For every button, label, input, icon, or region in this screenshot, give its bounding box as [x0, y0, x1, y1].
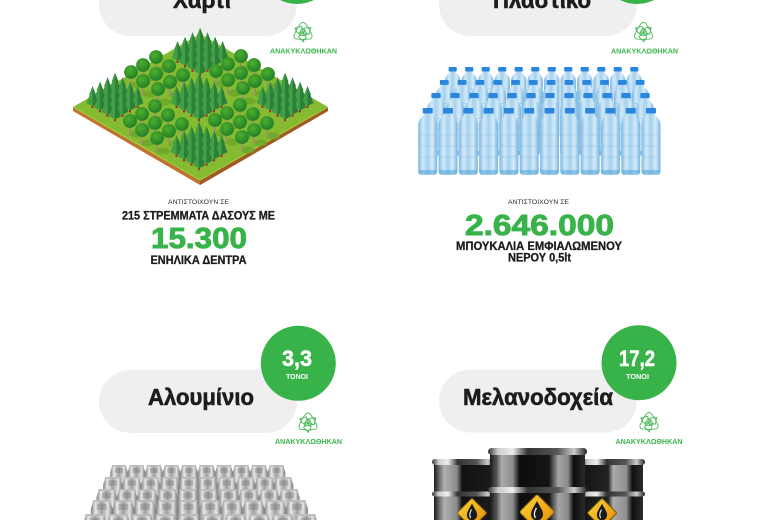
label pill: hotels: Μελανοδοχεία — [463, 384, 613, 410]
tonnage badge: paper — [260, 0, 334, 4]
tonnage badge: hotels: ΤΟΝΟΙ — [626, 372, 649, 381]
recycled label: hotels: ΑΝΑΚΥΚΛΩΘΗΚΑΝ — [616, 439, 682, 446]
panel: paper — [73, 0, 337, 267]
illustration: isometric forest — [73, 28, 328, 185]
equivalence text: forest: ΑΝΤΙΣΤΟΙΧΟΥΝ ΣΕ — [168, 199, 230, 206]
panel: hotels — [432, 325, 682, 520]
label pill: aluminium: Αλουμίνιο — [148, 384, 254, 410]
label pill: hotels — [439, 370, 637, 432]
equivalence text: forest: 215 ΣΤΡΕΜΜΑΤΑ ΔΑΣΟΥΣ ΜΕ — [122, 210, 275, 222]
label pill: plastic — [439, 0, 637, 36]
equivalence text: forest: ΕΝΗΛΙΚΑ ΔΕΝΤΡΑ — [150, 255, 246, 267]
panel: plastic — [418, 0, 678, 264]
recycled label: aluminium: ΑΝΑΚΥΚΛΩΘΗΚΑΝ — [275, 439, 342, 446]
equivalence text: bottles: ΜΠΟΥΚΑΛΙΑ ΕΜΦΙΑΛΩΜΕΝΟΥ — [456, 241, 622, 253]
equivalence text: bottles: ΑΝΤΙΣΤΟΙΧΟΥΝ ΣΕ — [508, 199, 570, 206]
icon: recycle hotels — [636, 412, 662, 434]
tonnage badge: hotels — [602, 325, 676, 400]
recycled label: paper: ΑΝΑΚΥΚΛΩΘΗΚΑΝ — [270, 48, 337, 56]
label pill: aluminium — [99, 370, 297, 433]
illustration: water bottles — [418, 67, 660, 175]
equivalence text: bottles: ΝΕΡΟΥ 0,5lt — [508, 252, 571, 264]
recycled label: plastic: ΑΝΑΚΥΚΛΩΘΗΚΑΝ — [611, 48, 678, 56]
icon: recycle aluminium — [295, 413, 321, 435]
equivalence text: forest — [122, 199, 275, 267]
tonnage badge: aluminium — [261, 326, 336, 401]
tonnage badge: plastic — [600, 0, 674, 4]
illustration: aluminium cans — [83, 465, 318, 520]
illustration: oil barrels — [432, 448, 645, 520]
equivalence text: bottles — [456, 199, 622, 264]
panel: aluminium — [83, 326, 342, 520]
icon: recycle plastic — [631, 22, 656, 44]
tonnage badge: aluminium: 3,3 — [282, 346, 312, 371]
tonnage badge: hotels: 17,2 — [619, 346, 655, 371]
equivalence text: forest: 15.300 — [151, 223, 247, 255]
label pill: paper — [99, 0, 297, 36]
tonnage badge: aluminium: ΤΟΝΟΙ — [286, 372, 308, 381]
icon: recycle paper — [290, 22, 316, 44]
equivalence text: bottles: 2.646.000 — [465, 210, 614, 242]
